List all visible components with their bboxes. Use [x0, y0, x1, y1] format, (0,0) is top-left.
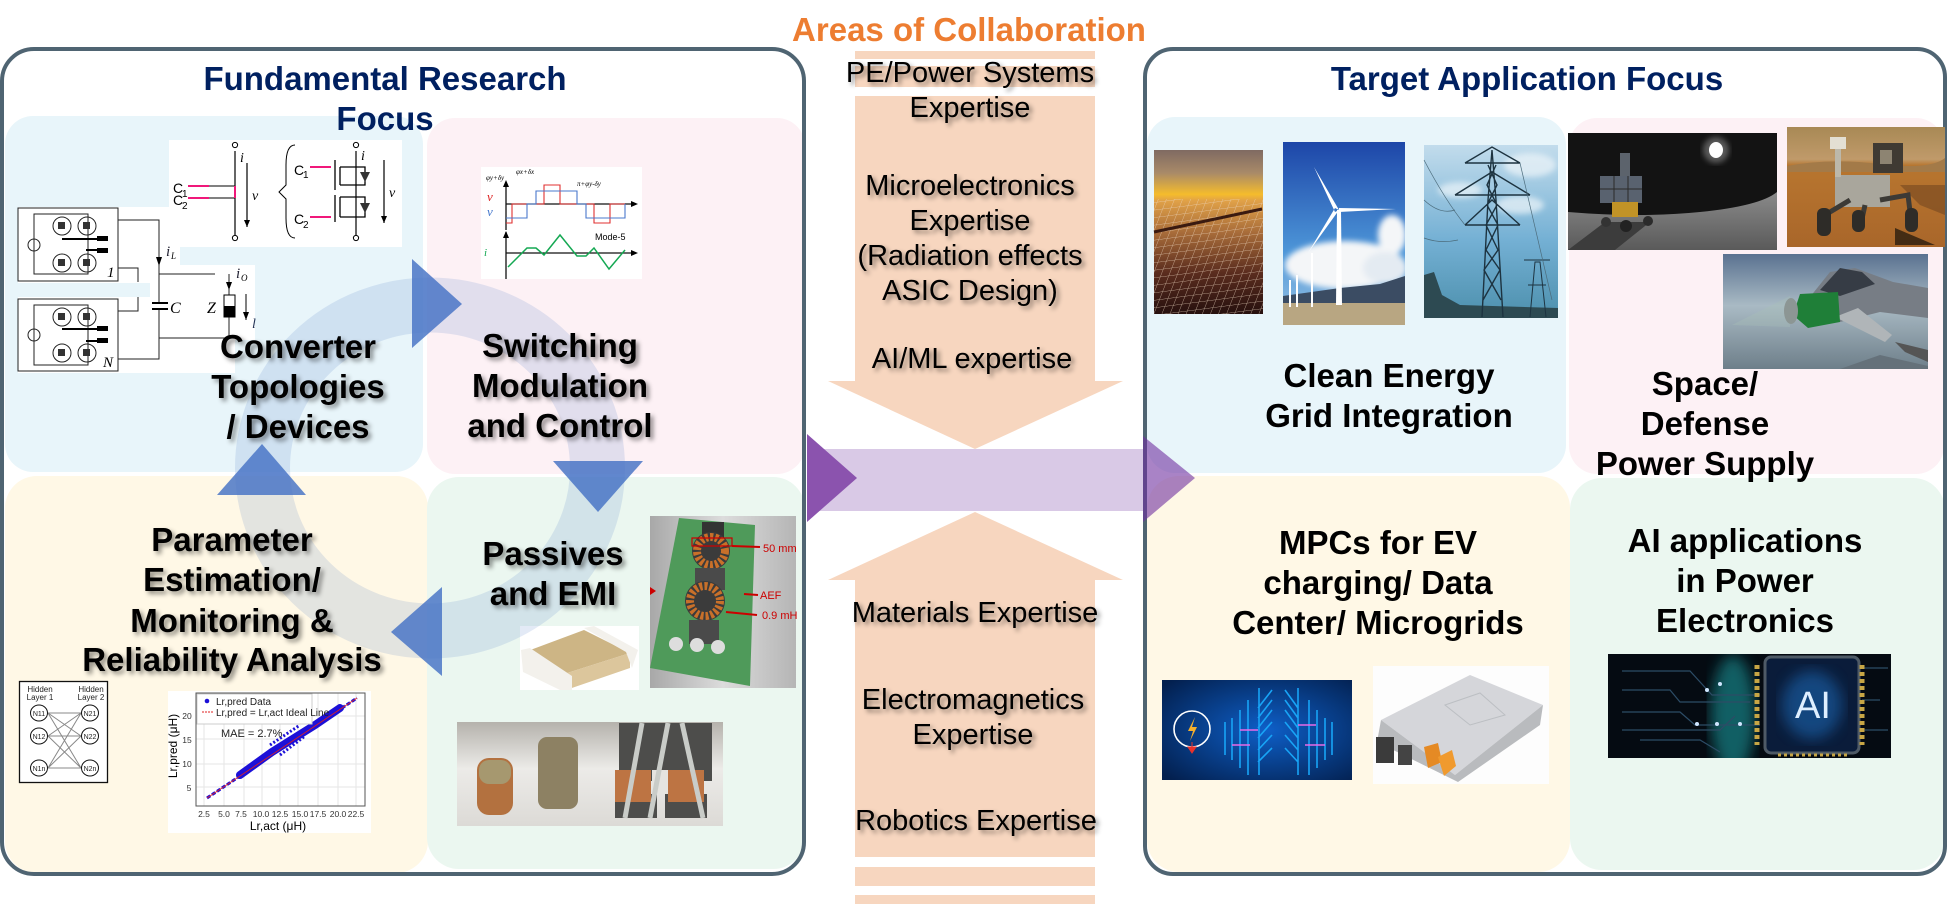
diagram: switch symbols: C [294, 162, 304, 178]
label: converter topologies: Converter [220, 328, 376, 365]
heading: fundamental research focus: Fundamental Research [203, 60, 567, 97]
arrowhead: right band triangle [1143, 436, 1195, 522]
label: converter topologies: / Devices [226, 408, 370, 445]
diagram: converter topology circuit: i [166, 244, 170, 260]
chart: MAE scatter: 10 [182, 759, 192, 769]
heading: target application focus: Target Application Focus [1331, 60, 1723, 97]
label: passives and EMI: Passives [482, 535, 624, 572]
label: parameter estimation: Monitoring & [130, 602, 334, 639]
diagram: switch symbols: 1 [303, 170, 309, 181]
panel: fundamental research focus [2, 49, 805, 874]
diagram: switch symbols: C [173, 180, 183, 196]
panel: switching modulation and control [427, 118, 805, 474]
label: switching modulation and control: Modulation [472, 367, 648, 404]
chart: MAE scatter: Lr,pred (μH) [166, 714, 180, 778]
chart: MAE scatter: 12.5 [272, 809, 289, 819]
photo: wind turbines [1283, 142, 1407, 325]
chart: MAE scatter: MAE = 2.7% [221, 728, 283, 740]
photo: EMI filter PCB: 0.9 mH [762, 610, 798, 622]
diagram: converter topology circuit: i [236, 266, 240, 282]
text: top expertise list: AI/ML expertise [872, 343, 1072, 375]
label: MPCs: Center/ Microgrids [1232, 604, 1524, 641]
label: parameter estimation: Parameter [151, 521, 313, 558]
label: AI applications: AI applications [1628, 522, 1862, 559]
diagram: switch symbols: 2 [303, 220, 309, 231]
chart: MAE scatter: 20.0 [330, 809, 347, 819]
text: top expertise list: ASIC Design) [882, 275, 1058, 307]
chart: modulation waveforms: v [487, 189, 493, 204]
panel: parameter estimation [5, 476, 428, 873]
chart: modulation waveforms [481, 167, 642, 279]
photo: magnetic cores [457, 722, 723, 826]
chart: modulation waveforms: φx+δx [516, 168, 535, 176]
photo: lunar rover [1568, 133, 1777, 250]
photo: data center [1162, 680, 1352, 780]
label: passives and EMI: and EMI [490, 575, 616, 612]
diagram: switch symbols [169, 140, 402, 247]
diagram: switch symbols: v [252, 189, 259, 204]
chart: MAE scatter: 17.5 [310, 809, 327, 819]
diagram: neural network: Layer 2 [78, 693, 105, 702]
chart: MAE scatter: 22.5 [348, 809, 365, 819]
diagram: neural network: N12 [33, 734, 46, 741]
heading: fundamental research focus: Focus [336, 100, 434, 137]
text: top expertise list: Microelectronics [865, 170, 1075, 202]
panel border: left [2, 49, 804, 874]
heading: areas of collaboration: Areas of Collaboration [792, 11, 1146, 48]
chart: MAE scatter [166, 691, 371, 833]
chart: MAE scatter: Lr,pred Data [216, 697, 271, 708]
text: top expertise list: (Radiation effects [857, 240, 1083, 272]
diagram: converter topology circuit [18, 207, 256, 373]
panel border: right [1145, 49, 1945, 874]
chart: MAE scatter: 2.5 [198, 809, 210, 819]
label: converter topologies: Topologies [211, 368, 385, 405]
photo: mars rover [1787, 127, 1945, 247]
chart: MAE scatter: 5.0 [218, 809, 230, 819]
panel: clean energy [1147, 117, 1566, 473]
arrow: horizontal flow band [807, 434, 1195, 522]
diagram: converter topology circuit: 1 [107, 265, 114, 281]
panel: converter topologies [5, 116, 423, 472]
diagram: neural network: N21 [84, 711, 97, 718]
chart: MAE scatter: Lr,pred = Lr,act Ideal Line [216, 708, 330, 719]
text: top expertise list: Expertise [910, 92, 1030, 124]
text: bottom expertise list: Materials Expertise [852, 597, 1098, 629]
photo: solar panels [1154, 150, 1263, 314]
label: clean energy: Grid Integration [1265, 397, 1513, 434]
photo: power converter module [1373, 666, 1549, 784]
arrow: down, switching to passives [553, 461, 643, 512]
chart: modulation waveforms: π+φy-δy [577, 180, 602, 188]
chart: modulation waveforms: Mode-5 [595, 232, 626, 242]
chart: MAE scatter: 20 [182, 711, 192, 721]
label: space defense: Space/ [1652, 365, 1758, 402]
chart: modulation waveforms: v [487, 204, 493, 219]
panel: MPCs [1147, 476, 1570, 872]
panel: target application focus [1145, 49, 1945, 874]
diagram: neural network: N11 [33, 711, 45, 718]
arrow: up collaboration arrow [828, 512, 1123, 904]
label: parameter estimation: Estimation/ [143, 561, 321, 598]
diagram: converter topology circuit: N [102, 355, 114, 371]
chart: MAE scatter: 7.5 [235, 809, 247, 819]
arrow: down collaboration arrow [828, 51, 1123, 449]
diagram: converter topology circuit: O [241, 273, 248, 283]
label: switching modulation and control: and Control [467, 407, 653, 444]
diagram: neural network: Layer 1 [27, 693, 54, 702]
diagram: neural network: N2n [84, 766, 97, 773]
label: switching modulation and control: Switching [482, 327, 638, 364]
diagram: switch symbols: C [173, 192, 183, 208]
diagram: neural network: N1n [33, 766, 46, 773]
chart: MAE scatter: Lr,act (μH) [250, 819, 306, 833]
diagram: converter topology circuit: l [252, 317, 256, 332]
diagram: switch symbols: 2 [182, 201, 188, 212]
diagram: neural network [20, 682, 108, 782]
chart: MAE scatter: 5 [187, 783, 192, 793]
diagram: switch symbols: C [294, 211, 304, 227]
chart: MAE scatter: 10.0 [253, 809, 270, 819]
arrow: right, topologies to switching [412, 259, 462, 348]
photo: EMI filter PCB: 50 mm [763, 543, 797, 555]
diagram: switch symbols: 1 [182, 189, 188, 200]
diagram: neural network: N22 [84, 734, 97, 741]
photo: AI chip: AI [1795, 685, 1831, 727]
diagram: converter topology circuit: C [170, 300, 181, 317]
diagram: converter topology circuit: L [170, 251, 176, 261]
diagram: switch symbols: i [240, 151, 244, 166]
photo: transmission tower [1424, 145, 1558, 318]
arrowhead: left band triangle [807, 434, 857, 522]
chart: MAE scatter: 15.0 [292, 809, 309, 819]
photo: EMI filter PCB [650, 516, 798, 688]
diagram: neural network: Hidden [78, 685, 104, 694]
label: AI applications: in Power [1676, 562, 1814, 599]
photo: EMI filter PCB: AEF [760, 590, 782, 602]
text: top expertise list: Expertise [910, 205, 1030, 237]
label: AI applications: Electronics [1656, 602, 1834, 639]
panel: space and defense [1569, 118, 1944, 474]
label: MPCs: MPCs for EV [1279, 524, 1477, 561]
chart: MAE scatter: 15 [182, 735, 192, 745]
text: bottom expertise list: Electromagnetics [862, 684, 1084, 716]
chart: modulation waveforms: φy+δy [486, 174, 505, 182]
label: space defense: Power Supply [1596, 445, 1815, 482]
label: parameter estimation: Reliability Analysis [82, 641, 382, 678]
label: space defense: Defense [1641, 405, 1769, 442]
label: clean energy: Clean Energy [1284, 357, 1495, 394]
arrow: up, parameter estimation to topologies [217, 444, 306, 495]
label: MPCs: charging/ Data [1263, 564, 1493, 601]
photo: ceramic capacitor [520, 626, 639, 690]
diagram: converter topology circuit: Z [207, 300, 217, 317]
text: top expertise list: PE/Power Systems [846, 57, 1094, 89]
diagram: neural network: Hidden [27, 685, 53, 694]
photo: AI chip [1608, 654, 1891, 758]
panel: passives and EMI [427, 477, 805, 869]
panel: AI applications [1570, 478, 1945, 870]
diagram: switch symbols: i [361, 149, 365, 164]
chart: modulation waveforms: i [484, 247, 487, 259]
text: bottom expertise list: Expertise [913, 719, 1033, 751]
diagram: switch symbols: v [389, 186, 396, 201]
photo: fighter jet [1723, 254, 1928, 369]
cycle arrow ring [217, 259, 643, 676]
arrow: left, passives to parameter estimation [391, 587, 442, 676]
text: bottom expertise list: Robotics Expertise [855, 805, 1097, 837]
